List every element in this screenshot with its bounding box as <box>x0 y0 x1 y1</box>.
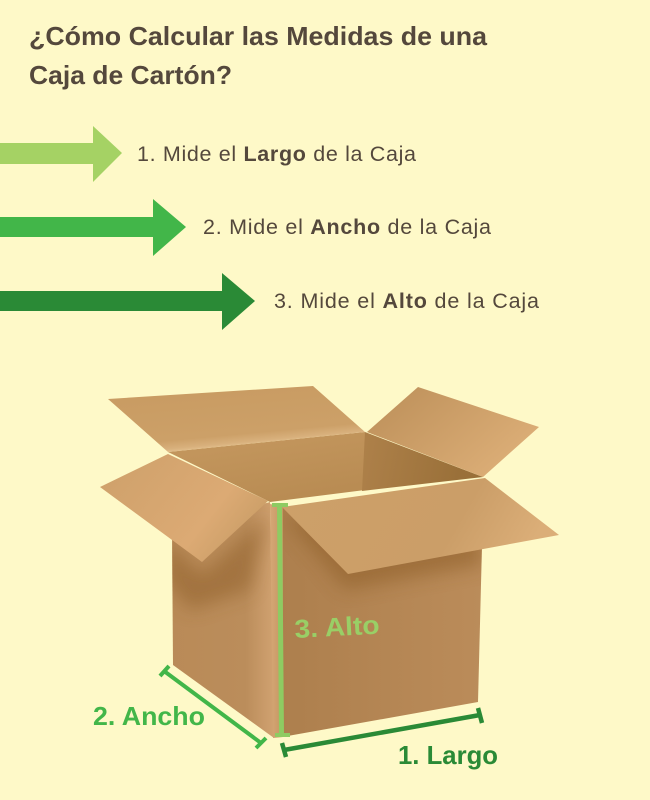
title: Caja de Cartón? <box>29 60 232 90</box>
back left flap <box>108 386 365 452</box>
step 3 text: 3. Mide el Alto de la Caja <box>274 289 539 313</box>
box side wall <box>362 432 483 491</box>
back right flap <box>367 387 539 477</box>
step 1 text: 1. Mide el Largo de la Caja <box>137 142 416 166</box>
label: 1. Largo: 1. Largo <box>398 740 498 770</box>
right front flap <box>282 478 559 574</box>
illustration: open cardboard box <box>100 386 559 745</box>
measure line: alto <box>272 505 290 735</box>
label: 2. Ancho: 2. Ancho <box>93 701 205 731</box>
label: 3. Alto: 3. Alto <box>294 610 380 644</box>
left front flap <box>100 454 268 562</box>
box front corner <box>270 504 283 738</box>
box right face <box>280 500 485 740</box>
arrow 3: alto <box>0 273 255 330</box>
arrow 1: largo <box>0 126 122 182</box>
measure line: ancho <box>160 666 266 748</box>
measure line: largo <box>282 708 482 757</box>
box left face <box>172 502 273 738</box>
title: ¿Cómo Calcular las Medidas de una <box>29 21 488 51</box>
step 2 text: 2. Mide el Ancho de la Caja <box>203 215 491 239</box>
box back wall <box>168 432 365 502</box>
title <box>29 21 488 90</box>
arrow 2: ancho <box>0 199 186 256</box>
